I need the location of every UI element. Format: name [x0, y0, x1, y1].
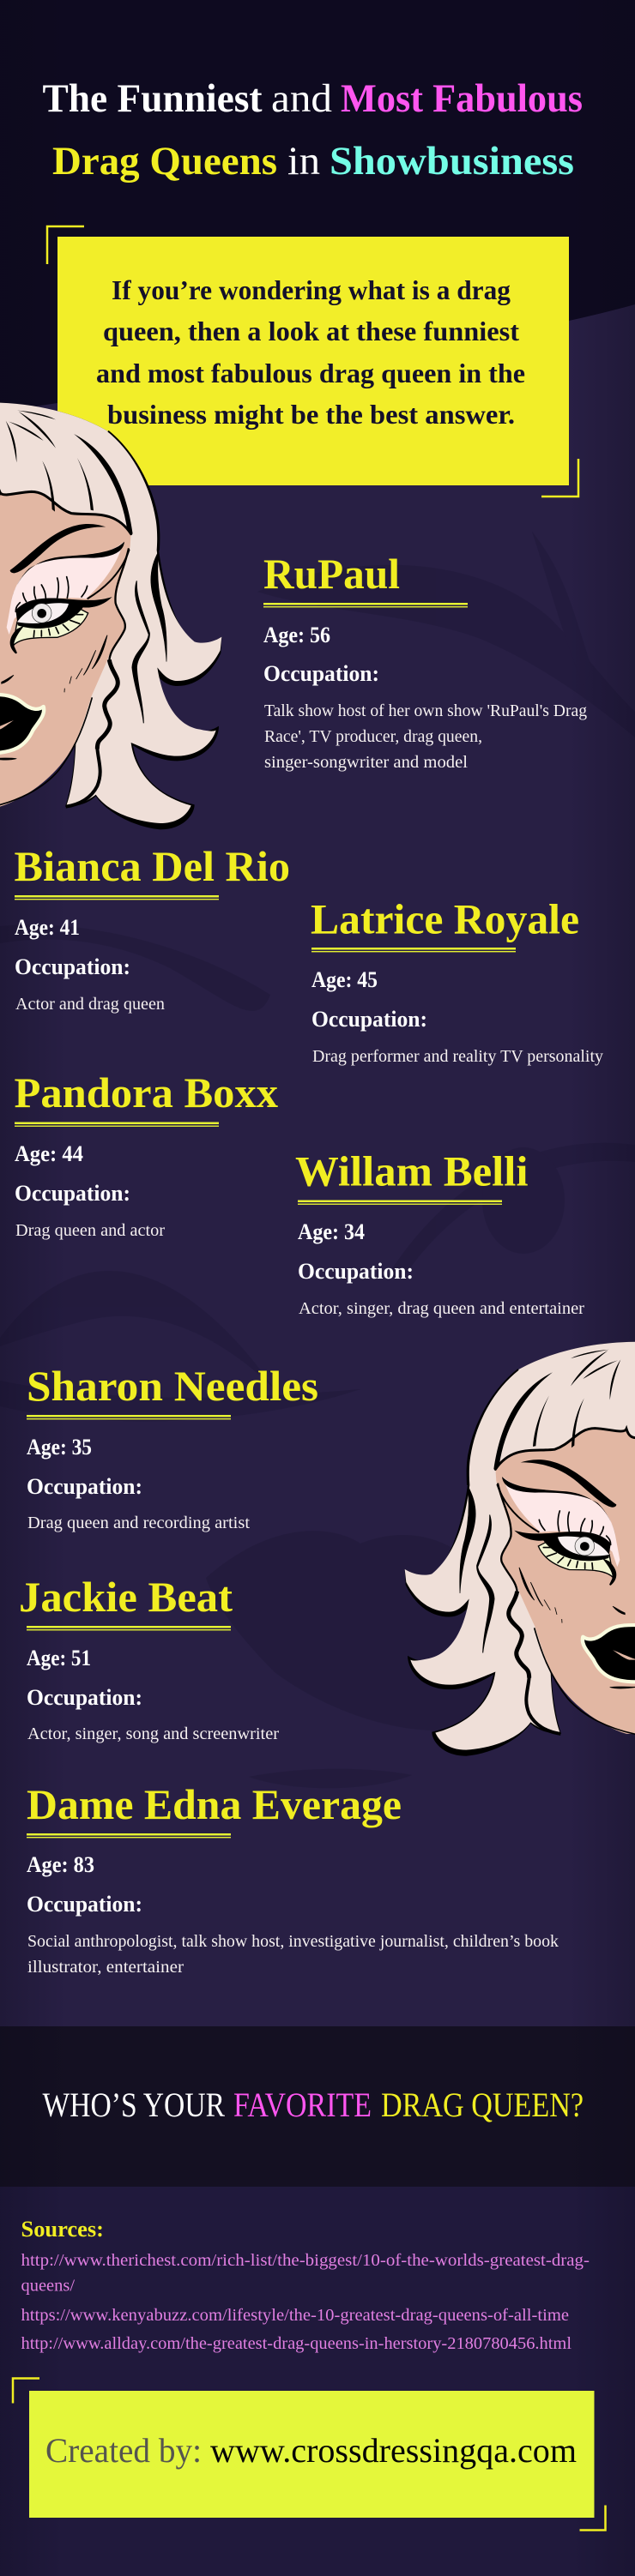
- question banner: WHO’S YOUR: [43, 2085, 225, 2124]
- profile: Dame Edna Everage: Dame Edna Everage: [27, 1780, 402, 1828]
- intro callout: and most fabulous drag queen in the: [96, 358, 525, 388]
- profile: Bianca Del Rio: [14, 842, 290, 1014]
- credit box: Created by:: [45, 2431, 202, 2470]
- profile: Dame Edna Everage: Occupation:: [27, 1892, 142, 1917]
- profile: Pandora Boxx: [14, 1068, 278, 1240]
- profile: RuPaul: Occupation:: [263, 661, 379, 686]
- profile: Latrice Royale: [311, 895, 603, 1066]
- profile: Willam Belli: Age: 34: [298, 1219, 365, 1244]
- profile: Dame Edna Everage: [27, 1780, 559, 1977]
- profile: Sharon Needles: Sharon Needles: [27, 1362, 318, 1410]
- profile: Pandora Boxx: Occupation:: [15, 1181, 130, 1206]
- profile: RuPaul: [263, 550, 587, 772]
- title: in: [287, 139, 320, 184]
- profile: Sharon Needles: Drag queen and recording artist: [27, 1514, 250, 1532]
- illustration: drag queen face, right: [405, 1342, 635, 1756]
- intro bracket bottom-right: [541, 459, 578, 497]
- illustration: drag queen face, left: [0, 402, 221, 829]
- profile: Jackie Beat: Age: 51: [27, 1646, 91, 1670]
- credit box: www.crossdressingqa.com: [210, 2431, 577, 2470]
- title: The Funniest: [43, 76, 263, 121]
- profile: Willam Belli: Actor, singer, drag queen and entertainer: [299, 1299, 584, 1318]
- profile: Pandora Boxx: Pandora Boxx: [14, 1068, 278, 1116]
- profile: Jackie Beat: [19, 1573, 279, 1743]
- profile: Sharon Needles: [27, 1362, 318, 1532]
- profile: Willam Belli: [295, 1147, 584, 1318]
- profile: Latrice Royale: Occupation:: [311, 1007, 427, 1032]
- profile: Latrice Royale: Drag performer and reality TV personality: [312, 1047, 603, 1066]
- profile: Jackie Beat: Jackie Beat: [19, 1573, 233, 1621]
- intro callout: If you’re wondering what is a drag: [112, 274, 511, 305]
- sources: http://www.therichest.com/rich-list/the-biggest/10-of-the-worlds-greatest-drag-: [21, 2251, 590, 2270]
- title: [43, 76, 583, 184]
- profile: Bianca Del Rio: Occupation:: [15, 954, 130, 979]
- intro callout: [57, 237, 569, 485]
- sources: [21, 2217, 590, 2353]
- profile: Sharon Needles: Occupation:: [27, 1474, 142, 1499]
- profile: Bianca Del Rio: Bianca Del Rio: [14, 842, 290, 890]
- profile: Pandora Boxx: Age: 44: [15, 1141, 83, 1166]
- question banner: [43, 2085, 584, 2124]
- profile: RuPaul: Age: 56: [263, 623, 330, 647]
- profile: RuPaul: Race', TV producer, drag queen,: [264, 727, 482, 746]
- question banner: FAVORITE: [233, 2085, 372, 2124]
- intro bracket top-left: [47, 226, 84, 264]
- profile: RuPaul: singer-songwriter and model: [264, 753, 468, 772]
- profile: Latrice Royale: Latrice Royale: [311, 895, 579, 943]
- profile: RuPaul: RuPaul: [263, 550, 400, 598]
- credit bracket top-left: [13, 2379, 39, 2403]
- profile: Bianca Del Rio: Age: 41: [15, 915, 80, 940]
- profile: Dame Edna Everage: Social anthropologist, talk show host, investigative journalist, children’s book: [27, 1932, 559, 1951]
- credit box: [29, 2391, 594, 2518]
- sources: queens/: [21, 2276, 75, 2295]
- intro callout: queen, then a look at these funniest: [103, 316, 519, 346]
- intro callout: business might be the best answer.: [107, 399, 515, 430]
- profile: Jackie Beat: Actor, singer, song and screenwriter: [27, 1724, 279, 1743]
- question banner: DRAG QUEEN?: [381, 2085, 584, 2124]
- credit bracket bottom-right: [580, 2506, 606, 2530]
- profile: Dame Edna Everage: illustrator, entertainer: [27, 1958, 184, 1977]
- profile: Willam Belli: Willam Belli: [295, 1147, 529, 1195]
- sources: https://www.kenyabuzz.com/lifestyle/the-10-greatest-drag-queens-of-all-time: [21, 2306, 569, 2325]
- profile: Willam Belli: Occupation:: [298, 1259, 414, 1284]
- sources: Sources:: [21, 2217, 104, 2242]
- profile: Dame Edna Everage: Age: 83: [27, 1852, 94, 1877]
- title: and: [271, 76, 332, 121]
- sources: http://www.allday.com/the-greatest-drag-queens-in-herstory-2180780456.html: [21, 2334, 572, 2353]
- profile: Pandora Boxx: Drag queen and actor: [15, 1221, 165, 1240]
- title: Showbusiness: [330, 139, 574, 184]
- profile: RuPaul: Talk show host of her own show 'RuPaul's Drag: [264, 701, 587, 720]
- profile: Jackie Beat: Occupation:: [27, 1685, 142, 1710]
- profile: Bianca Del Rio: Actor and drag queen: [15, 995, 165, 1014]
- title: Most Fabulous: [341, 76, 583, 121]
- profile: Sharon Needles: Age: 35: [27, 1435, 92, 1460]
- title: Drag Queens: [52, 139, 277, 184]
- profile: Latrice Royale: Age: 45: [311, 967, 378, 992]
